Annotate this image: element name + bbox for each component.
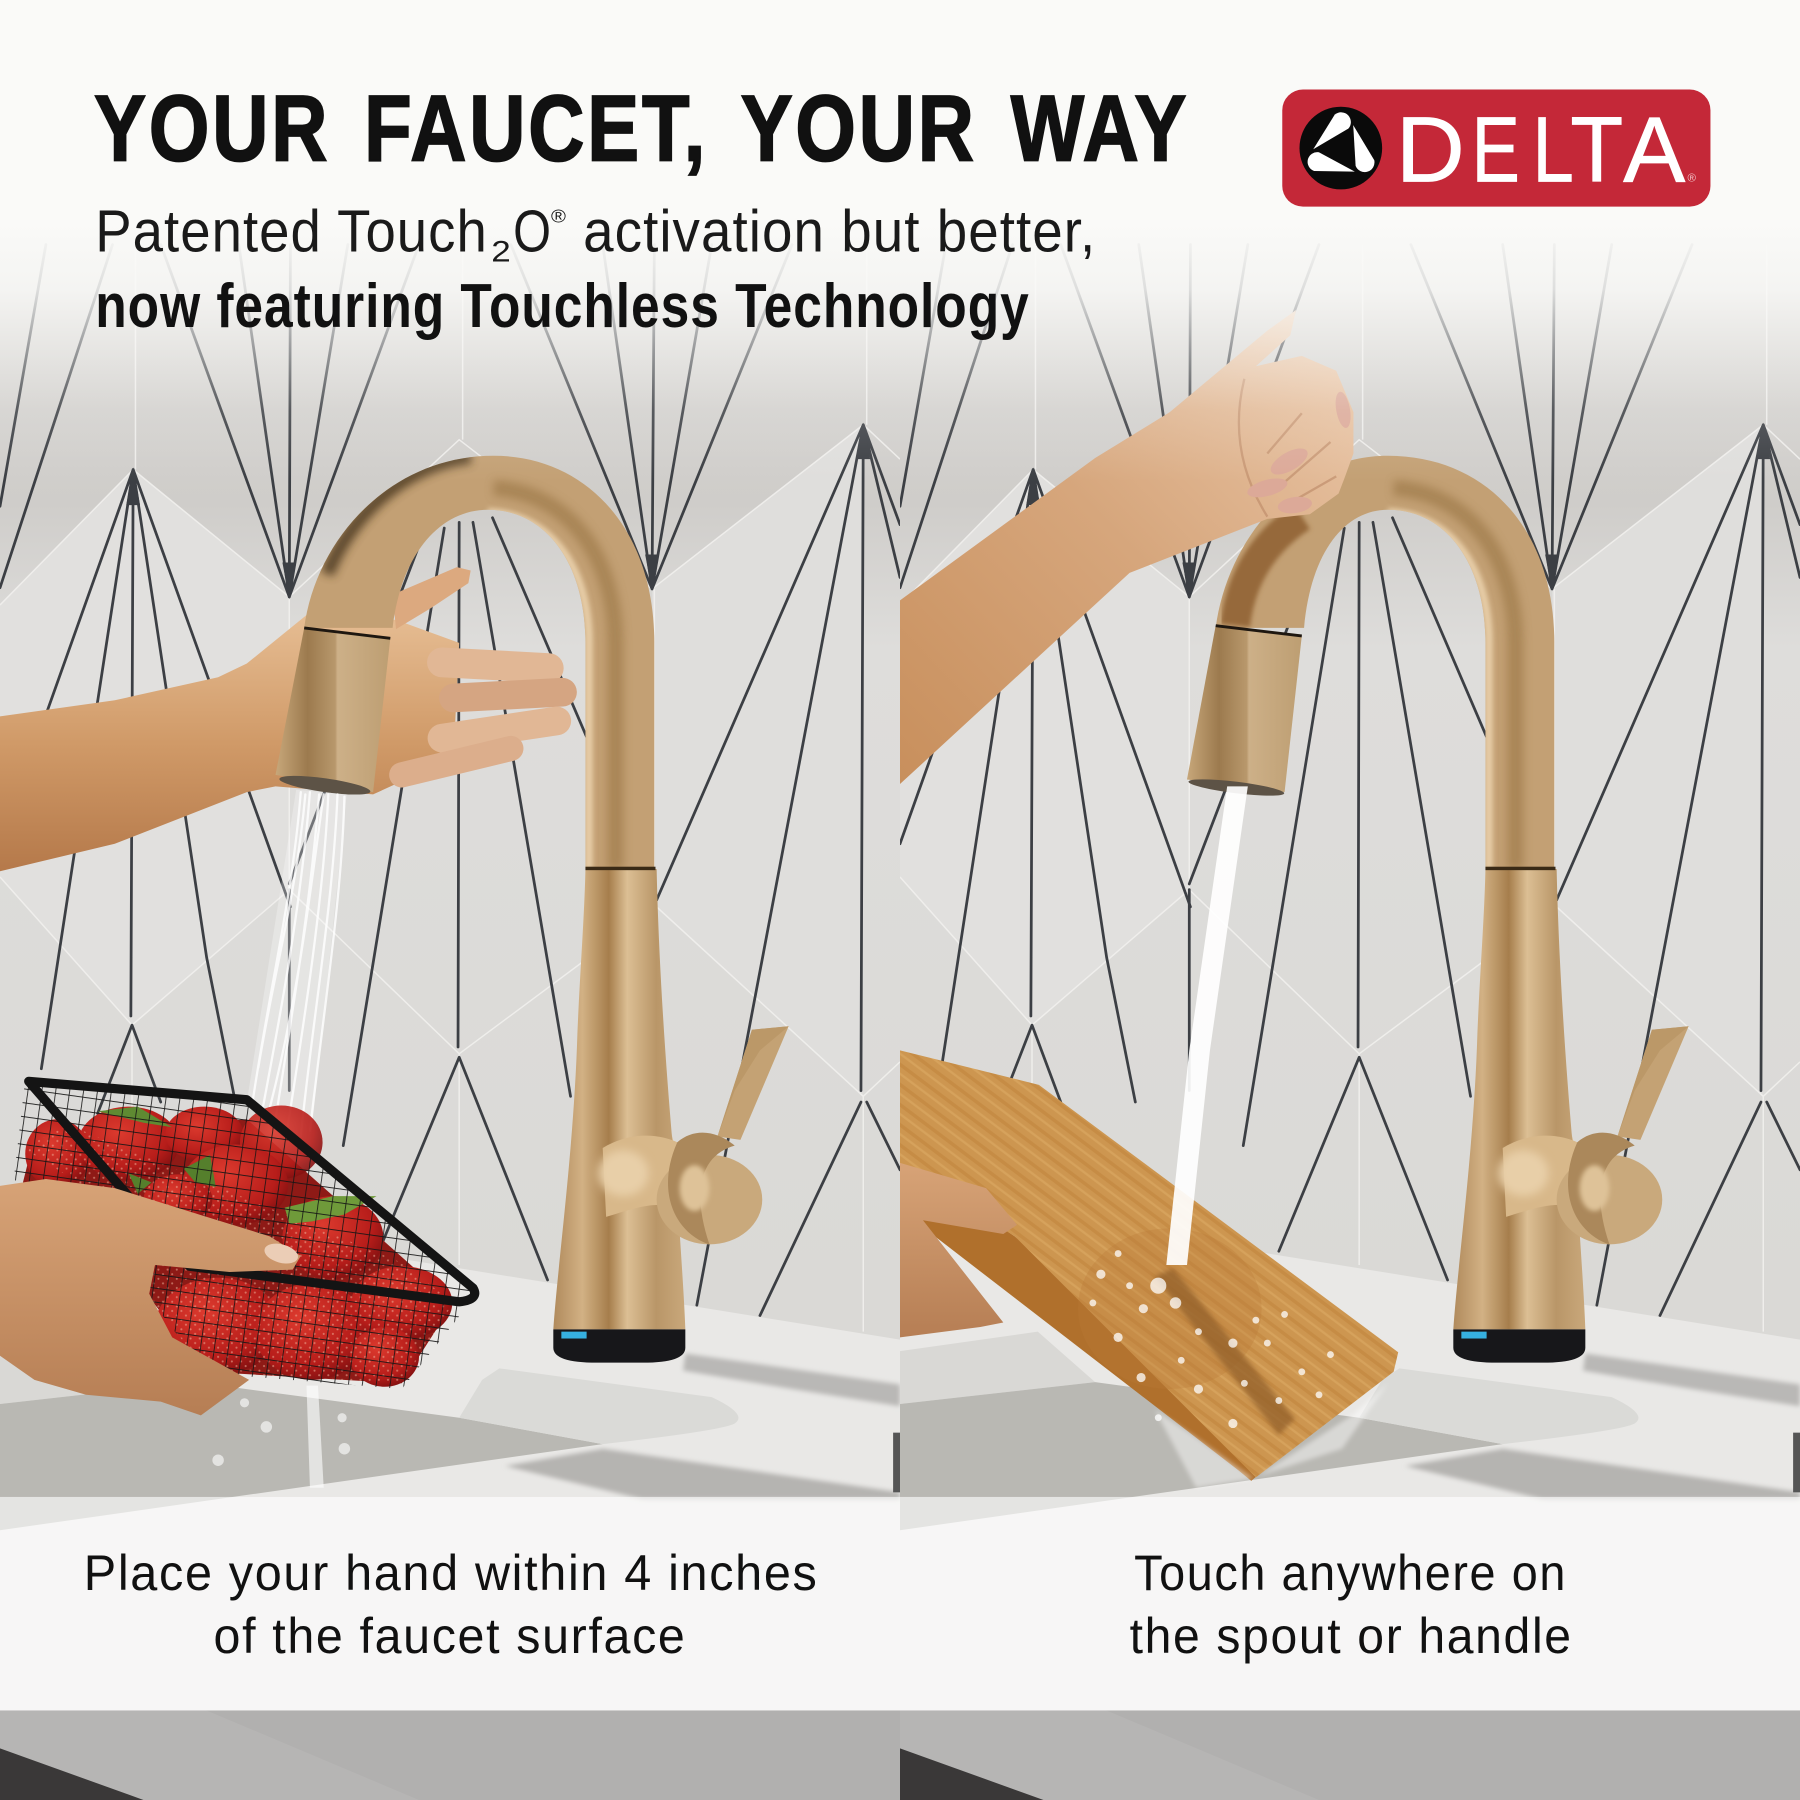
subtitle line one: 2	[491, 236, 511, 269]
arm and hand behind faucet head	[0, 567, 562, 871]
faucet spray head	[276, 628, 390, 798]
panel: left scene, hand within 4 inches	[0, 244, 900, 1800]
icon: faucet body and handle	[553, 869, 789, 1363]
caption band	[0, 1497, 1800, 1710]
logo wordmark: D	[1396, 97, 1465, 201]
top white fade	[0, 0, 1800, 482]
faucet spray head	[1187, 626, 1302, 799]
water spray	[247, 790, 347, 1148]
water stream	[1166, 786, 1248, 1265]
icon: Delta triangle mark	[1299, 107, 1382, 189]
faucet spout	[1216, 456, 1555, 870]
title: YOUR FAUCET, YOUR WAY	[94, 76, 1189, 181]
logo wordmark: L	[1533, 97, 1574, 201]
logo: Delta	[1282, 90, 1710, 207]
strawberries	[23, 1105, 453, 1387]
panel: right scene, touch anywhere	[900, 244, 1800, 1800]
subtitle line one	[95, 197, 1096, 269]
black rim	[29, 1081, 475, 1302]
caption: right: the spout or handle	[1130, 1607, 1573, 1664]
logo wordmark: T	[1570, 97, 1623, 201]
logo wordmark	[1396, 97, 1685, 201]
cutting board	[900, 1050, 1398, 1488]
wall and countertop	[900, 244, 1800, 1800]
faucet spout	[304, 456, 655, 870]
subtitle line one: ®	[551, 206, 566, 227]
arm and hand touching spout	[900, 310, 1353, 784]
logo wordmark: E	[1472, 97, 1520, 201]
subtitle line one: O	[513, 197, 551, 264]
wall and countertop	[0, 244, 900, 1800]
wire mesh	[14, 1079, 479, 1389]
wet area and splash	[1078, 1228, 1388, 1488]
logo wordmark: A	[1623, 97, 1685, 201]
hand holding board	[900, 1163, 1017, 1337]
caption: left: of the faucet surface	[214, 1607, 686, 1664]
basket with strawberries	[14, 1079, 479, 1389]
subtitle line two: now featuring Touchless Technology	[95, 272, 1030, 341]
caption: right	[1130, 1544, 1573, 1664]
water drips	[212, 1386, 350, 1488]
bottom shade band	[0, 1710, 1800, 1800]
registered mark: ®	[1688, 172, 1697, 184]
caption: left	[84, 1544, 818, 1664]
hand holding basket	[0, 1179, 301, 1415]
caption: left: Place your hand within 4 inches	[84, 1544, 818, 1601]
caption: right: Touch anywhere on	[1134, 1544, 1567, 1601]
subtitle line one: Patented Touch	[95, 197, 488, 264]
icon: faucet body and handle	[1453, 869, 1689, 1363]
subtitle line one: activation but better,	[583, 197, 1096, 264]
